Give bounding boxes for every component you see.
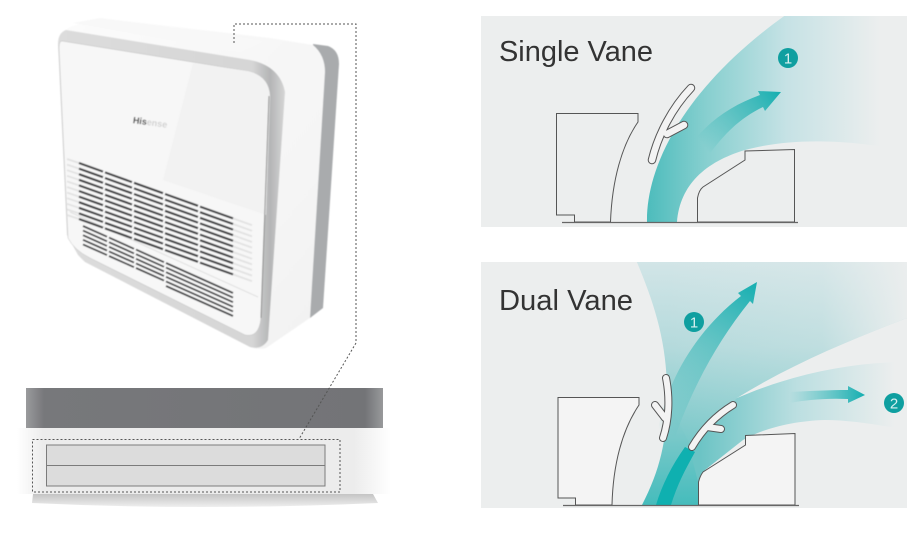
product: indoor unit 3D view: [58, 18, 339, 349]
number badge 2: [884, 393, 904, 413]
light front band: [17, 428, 391, 494]
heading: Single Vane: [499, 36, 653, 68]
airflow arrow 1: [658, 282, 757, 440]
right vane: [692, 405, 733, 447]
number badge 1: [778, 48, 798, 68]
unit body: [58, 18, 325, 349]
duct right: [698, 150, 794, 222]
vane: [652, 88, 691, 160]
duct left: [558, 398, 639, 505]
number badge 1: [684, 312, 704, 332]
tray: [32, 494, 378, 507]
grille fins: [67, 159, 252, 281]
airflow arrow: [696, 91, 781, 156]
airflow lower: [694, 364, 878, 482]
face gloss: [163, 63, 270, 215]
panel: single vane: [481, 14, 907, 227]
grey frame: [58, 30, 285, 348]
logo: Hisense: [132, 115, 168, 130]
dark rear block: [26, 388, 383, 428]
number badge 1: 1: [690, 314, 698, 332]
heading: Dual Vane: [499, 285, 633, 317]
panel background: [481, 16, 907, 227]
lower grille: [83, 226, 233, 316]
left vane: [655, 378, 668, 438]
product: bottom view of unit: [17, 388, 391, 507]
central stream: [656, 447, 695, 505]
airflow: [647, 16, 860, 222]
number badge 2: 2: [890, 396, 898, 412]
panel: dual vane: [481, 260, 907, 508]
dotted highlight: [32, 440, 340, 492]
unit back grey edge: [310, 44, 339, 318]
dotted leader line: [234, 24, 356, 439]
front face: [59, 41, 270, 335]
vane outlet rectangles: [46, 445, 325, 486]
panel background: [481, 262, 907, 508]
top panel: [73, 18, 265, 52]
airflow upper: [636, 260, 907, 505]
duct left: [556, 114, 638, 222]
baseline: [563, 504, 799, 506]
number badge 1: 1: [784, 50, 792, 68]
duct right: [698, 434, 795, 505]
airflow arrow 2: [790, 386, 865, 403]
upper grille: [79, 163, 233, 274]
baseline: [562, 222, 798, 224]
face bottom seam: [70, 212, 258, 297]
face right shadow edge: [261, 96, 269, 318]
